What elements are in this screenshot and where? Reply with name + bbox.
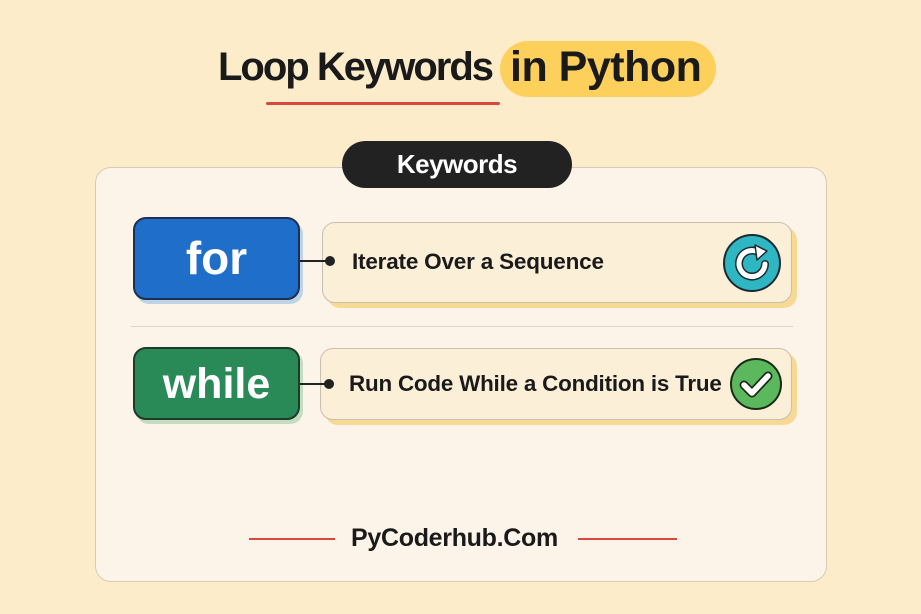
row: while (133, 347, 797, 425)
description box: Run Code While a Condition is True (349, 371, 722, 396)
row: for (133, 217, 797, 308)
keyword box: while (133, 347, 300, 420)
description box (322, 222, 792, 303)
heading pill: Keywords: Keywords (397, 149, 517, 179)
connector (300, 383, 330, 385)
title highlight pill (500, 41, 716, 97)
description box: Iterate Over a Sequence (352, 249, 604, 274)
keyword box: for (133, 217, 300, 300)
divider (131, 326, 793, 327)
connector (300, 260, 331, 262)
icon: check (730, 358, 782, 410)
title underline (266, 102, 500, 105)
heading pill: Keywords (342, 141, 572, 188)
keyword box: while: while (163, 360, 270, 408)
title text part 2: in Python (510, 43, 701, 91)
description box (320, 348, 792, 420)
title (218, 41, 716, 105)
keyword box: for: for (186, 232, 247, 284)
footer text: PyCoderhub.Com (351, 524, 558, 552)
panel: keywords (95, 167, 827, 582)
title text part 1: Loop Keywords (218, 45, 492, 89)
icon: refresh (723, 234, 781, 292)
